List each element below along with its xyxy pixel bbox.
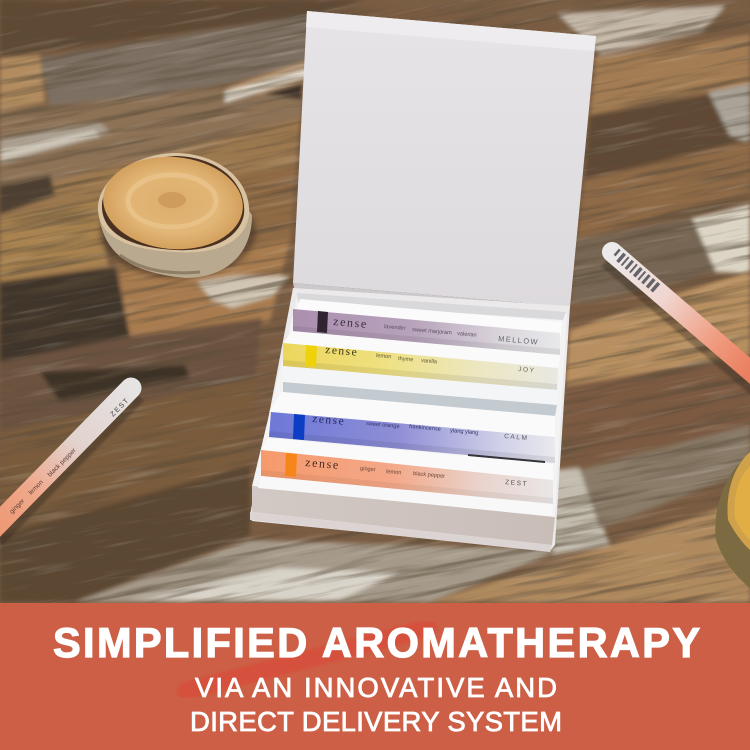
pen: joy: thyme	[398, 356, 414, 363]
pen: zest in box: lemon	[386, 469, 402, 476]
pen: mellow: MELLOW	[498, 334, 539, 347]
white divider above zest pen	[261, 438, 553, 481]
pen: joy: vanilla	[421, 358, 438, 365]
pen: zest in box: ginger	[360, 466, 376, 473]
pen: zest in box: zense	[305, 455, 340, 472]
pen: zest in box: black pepper	[413, 471, 445, 480]
pen: mellow: zense	[333, 314, 368, 331]
pen: joy: zense	[325, 344, 359, 359]
pen: zest, left: black pepper	[46, 447, 78, 478]
white divider above calm pen	[269, 392, 555, 438]
pen: calm	[269, 412, 555, 463]
empty pen slot	[283, 366, 557, 416]
pen: zest, left: ginger	[8, 497, 27, 515]
pen: calm: sweet orange	[366, 421, 400, 430]
pen: mellow: valerian	[457, 331, 477, 339]
title: SIMPLIFIED AROMATHERAPY	[53, 619, 700, 666]
birch wood coaster, right edge	[715, 452, 750, 588]
pen: zest, left: lemon	[27, 479, 45, 496]
subtitle line 2: DIRECT DELIVERY SYSTEM	[190, 706, 562, 737]
open gift box	[250, 11, 596, 552]
subtitle line 1: VIA AN INNOVATIVE AND	[195, 672, 557, 703]
pen: mellow: sweet marjoram	[412, 327, 452, 336]
pen: zest in box	[261, 450, 553, 504]
white divider above joy pen	[283, 331, 560, 369]
pen: calm: frankincense	[409, 424, 441, 433]
pen: calm: zense	[312, 413, 346, 428]
pen: zest, left	[0, 388, 136, 537]
white strip below zest pen	[258, 476, 553, 516]
birch wood coaster, left	[98, 151, 256, 278]
pen: mellow	[293, 309, 560, 355]
banner	[0, 603, 750, 750]
pen: calm: CALM	[504, 433, 529, 442]
pen ghost behind banner	[186, 628, 428, 691]
box base	[250, 288, 570, 552]
pen: joy	[283, 343, 558, 390]
pen: joy: JOY	[518, 366, 536, 375]
pen: zest, left: ZEST	[109, 397, 131, 418]
pen: mellow: lavender	[384, 324, 406, 332]
pen: calm: ylang ylang	[450, 428, 479, 436]
box lid	[293, 11, 596, 318]
pen: joy: lemon	[376, 353, 392, 360]
pen: zest in box: ZEST	[505, 479, 528, 488]
pen: barcode end, right	[608, 249, 750, 395]
